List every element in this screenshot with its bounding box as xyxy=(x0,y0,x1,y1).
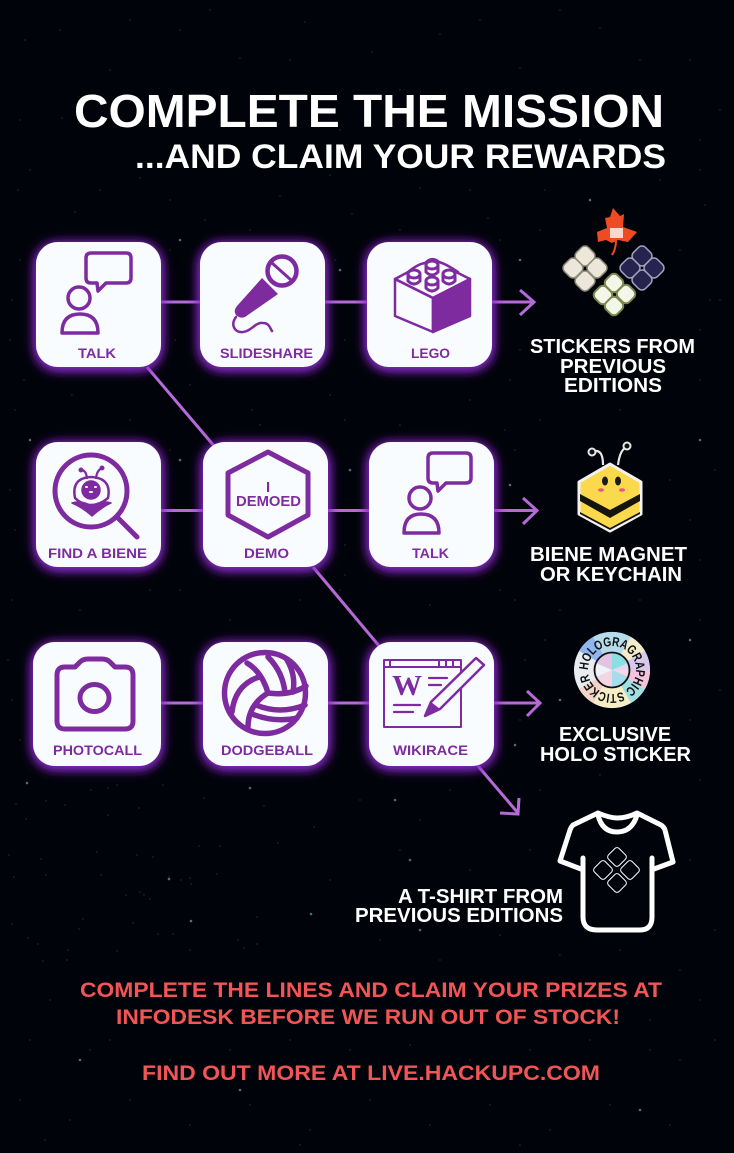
caption: holo sticker xyxy=(540,724,692,766)
card: wikirace: WIKIRACE xyxy=(393,742,468,758)
icon: camera xyxy=(57,659,133,729)
card: dodgeball: DODGEBALL xyxy=(221,742,313,758)
icon: holographic sticker: HOLOGRAGRAPHIC STICKER xyxy=(579,637,646,703)
connector lines and arrows xyxy=(147,290,540,814)
caption: t-shirt: PREVIOUS EDITIONS xyxy=(355,905,563,927)
icon: person talking xyxy=(404,453,471,533)
icon: magnifier with robot bee xyxy=(55,455,137,537)
card: demo xyxy=(203,442,328,567)
icon: biene magnet xyxy=(579,442,641,531)
icon: maple leaf sticker xyxy=(597,208,637,255)
icon: I demoed hexagon: I xyxy=(266,479,270,496)
card: talk second: TALK xyxy=(412,545,449,561)
icon: person talking xyxy=(62,253,131,333)
caption: biene magnet: BIENE MAGNET xyxy=(530,544,687,566)
card: slideshare xyxy=(200,242,325,367)
icon: cream sticker cluster xyxy=(561,244,609,293)
card: find a biene: FIND A BIENE xyxy=(48,545,147,561)
icon: wiki window and pencil: W xyxy=(392,671,422,702)
call to action text: INFODESK BEFORE WE RUN OUT OF STOCK! xyxy=(116,1006,620,1029)
caption: stickers: STICKERS FROM xyxy=(530,336,695,358)
card: talk second xyxy=(369,442,494,567)
card: lego xyxy=(367,242,492,367)
caption: biene magnet xyxy=(530,544,687,586)
call to action text: COMPLETE THE LINES AND CLAIM YOUR PRIZES AT xyxy=(80,979,662,1002)
caption: t-shirt: A T-SHIRT FROM xyxy=(398,886,563,908)
shirt logo keys xyxy=(592,846,641,894)
card: photocall: PHOTOCALL xyxy=(53,742,142,758)
icon: lego brick xyxy=(395,259,470,332)
caption: holo sticker: EXCLUSIVE xyxy=(559,724,671,746)
caption: holo sticker: HOLO STICKER xyxy=(540,744,692,766)
icon: green sticker cluster xyxy=(592,272,637,317)
card: photocall xyxy=(33,642,161,766)
icon: t-shirt xyxy=(560,813,673,930)
card: lego: LEGO xyxy=(411,345,450,361)
caption: biene magnet: OR KEYCHAIN xyxy=(540,564,682,586)
card: wikirace xyxy=(369,642,494,766)
title xyxy=(74,85,666,176)
icon: microphone xyxy=(233,256,296,332)
card: slideshare: SLIDESHARE xyxy=(220,345,313,361)
icon: dark sticker cluster xyxy=(618,244,666,292)
icon: volleyball xyxy=(224,652,306,734)
caption: stickers: EDITIONS xyxy=(564,375,662,397)
caption: stickers: PREVIOUS xyxy=(560,356,666,378)
title: ...AND CLAIM YOUR REWARDS xyxy=(135,138,666,176)
card: find a biene xyxy=(36,442,161,567)
call to action text xyxy=(80,979,662,1085)
icon: I demoed hexagon: DEMOED xyxy=(236,493,301,510)
title: COMPLETE THE MISSION xyxy=(74,85,664,137)
caption: stickers xyxy=(530,336,695,397)
card: demo: DEMO xyxy=(244,545,289,561)
card: dodgeball xyxy=(203,642,328,766)
card: talk: TALK xyxy=(78,345,116,361)
icon: I demoed hexagon xyxy=(228,452,308,537)
caption: t-shirt xyxy=(355,886,563,927)
call to action text: FIND OUT MORE AT LIVE.HACKUPC.COM xyxy=(142,1062,600,1085)
card: talk xyxy=(36,242,161,367)
